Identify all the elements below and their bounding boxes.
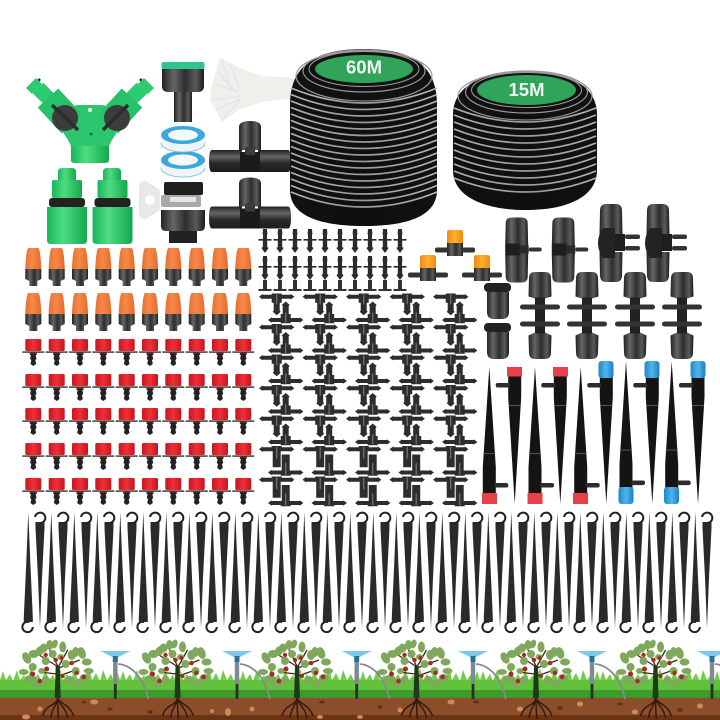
white cable ties: [210, 58, 295, 122]
60M hose coil: [290, 49, 437, 226]
orange mist sprayers, two rows: [25, 248, 251, 331]
garden strip illustration: [0, 639, 720, 720]
15M hose coil: [453, 71, 597, 210]
PTFE tape rolls: [161, 126, 205, 177]
quick connector right: [92, 168, 132, 244]
tap adaptor: [162, 62, 204, 122]
15M green label: [477, 75, 576, 105]
Y hose splitter valve: [26, 78, 154, 163]
irrigation sprinklers: [100, 651, 720, 699]
hooked tube stakes row: [22, 512, 712, 632]
end plugs: [484, 283, 511, 359]
grass: [0, 667, 720, 698]
four-way tube connectors: [520, 272, 702, 359]
red and blue dripper spikes: [482, 361, 706, 504]
hose clamp adaptor: [139, 181, 205, 243]
straight barb connectors, three rows: [258, 229, 406, 291]
soil: [0, 698, 720, 720]
large tee connector lower: [209, 178, 291, 228]
15M text: 15M: [508, 79, 544, 100]
red adjustable drippers, five rows: [22, 339, 254, 505]
quick connector left: [47, 168, 87, 244]
single barb tube connectors: [505, 218, 588, 282]
fruit trees: [19, 639, 691, 719]
double barb tube connectors: [598, 204, 687, 282]
tee barb connectors grid: [259, 294, 477, 506]
orange mini shut-off valves: [408, 230, 502, 281]
60M text: 60M: [346, 56, 382, 78]
60M green label: [315, 55, 413, 83]
large tee connector upper: [209, 121, 291, 172]
